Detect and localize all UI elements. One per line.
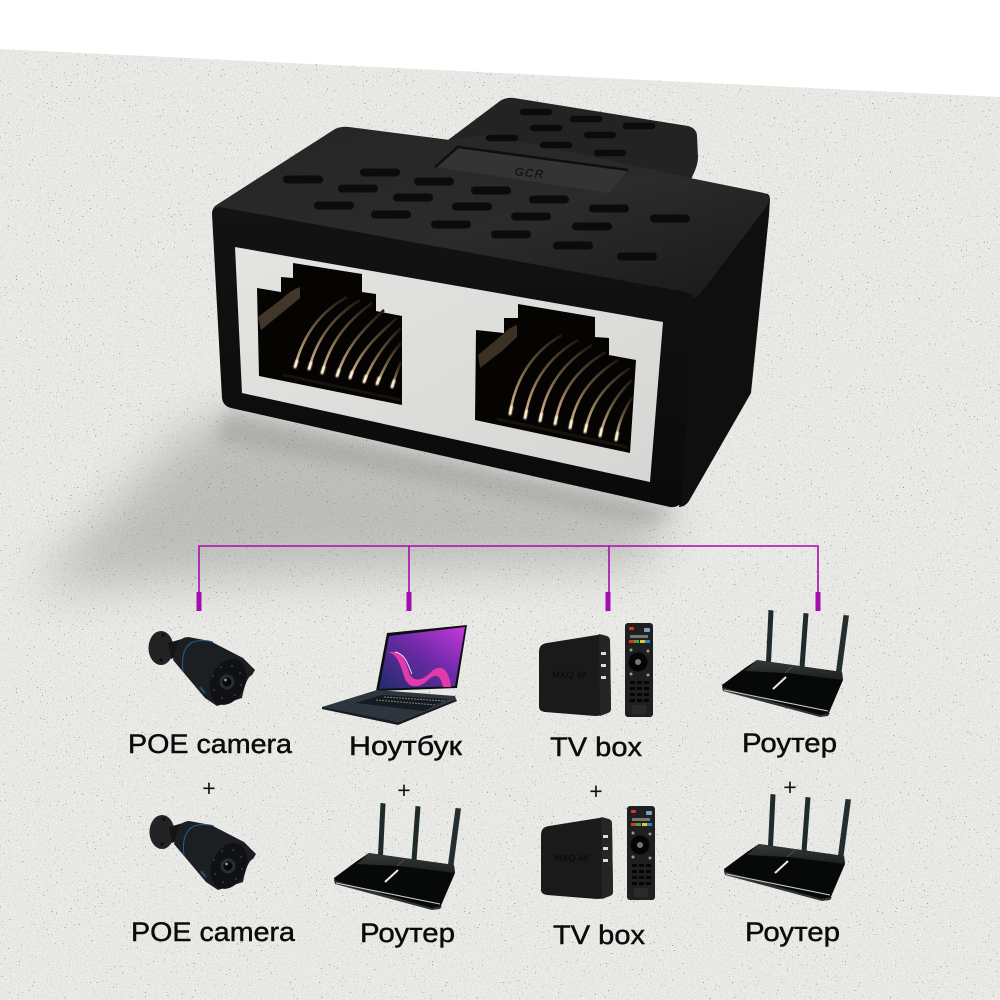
label: TV box second: TV box xyxy=(553,920,646,950)
device 4b: router xyxy=(724,794,851,947)
device 2: laptop xyxy=(322,625,467,761)
device: GCR label plate xyxy=(435,147,628,193)
device: white front plate xyxy=(235,247,663,482)
device: top ventilation slots xyxy=(287,172,686,256)
device 1b: POE camera xyxy=(131,815,296,947)
laptop lid xyxy=(376,625,467,691)
label: POE camera: POE camera xyxy=(128,729,293,759)
device: back section xyxy=(440,98,698,209)
label: POE camera second: POE camera xyxy=(131,917,296,947)
device 2b: router xyxy=(334,803,461,948)
device: top face xyxy=(212,127,769,298)
RJ45 splitter device xyxy=(212,98,770,507)
label: TV box: TV box xyxy=(550,732,643,762)
device: left RJ45 port xyxy=(257,263,402,405)
laptop base xyxy=(322,690,456,722)
plus sign 4: + xyxy=(783,774,797,800)
label: Роутер: Роутер xyxy=(742,728,837,758)
device: GCR label plate: GCR xyxy=(514,165,545,182)
device: front face xyxy=(212,207,694,507)
laptop screen xyxy=(379,627,465,689)
device 1: POE camera xyxy=(128,631,293,759)
device 3b: TV box with remote xyxy=(541,806,655,950)
plus sign 3: + xyxy=(589,778,603,804)
connector lines (magenta) xyxy=(199,546,818,611)
device 3: TV box with remote: MXQ 4K xyxy=(552,670,589,681)
device: right RJ45 port xyxy=(475,304,636,453)
device 3: TV box with remote xyxy=(539,623,653,762)
label: Ноутбук: Ноутбук xyxy=(349,731,462,761)
plus sign 2: + xyxy=(397,777,411,803)
label: Роутер second fourth column: Роутер xyxy=(745,917,840,947)
device 3b: TV box with remote: MXQ 4K xyxy=(554,853,591,864)
plus sign 1: + xyxy=(202,775,216,801)
device 4: router xyxy=(722,610,849,758)
label: Роутер second column: Роутер xyxy=(360,918,455,948)
device: right side face xyxy=(679,194,770,507)
